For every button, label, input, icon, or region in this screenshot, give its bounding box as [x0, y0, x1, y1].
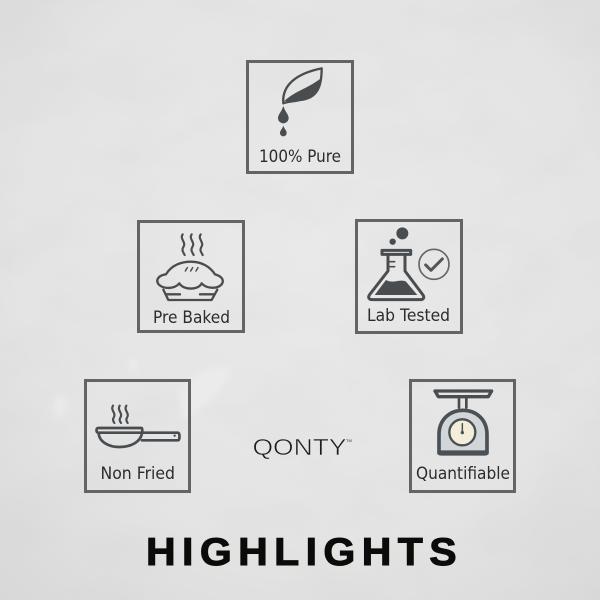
heading: HIGHLIGHTS: HIGHLIGHTS	[146, 531, 463, 574]
label: Non Fried: Non Fried	[100, 464, 175, 483]
label: 100% Pure: 100% Pure	[259, 147, 341, 166]
logo: QONTY: QONTY	[252, 434, 347, 460]
icon: check in circle	[419, 249, 449, 279]
label: Pre Baked: Pre Baked	[153, 308, 230, 327]
icon: pie with steam	[157, 234, 223, 300]
icon: leaf with drops	[278, 68, 322, 136]
label: Quantifiable: Quantifiable	[416, 464, 510, 483]
logo: QONTY: TM	[346, 438, 352, 443]
icon: frying pan with steam	[96, 406, 179, 447]
panel: Non Fried	[86, 380, 190, 492]
panel: Lab Tested	[356, 220, 462, 332]
icon: kitchen scale	[435, 391, 492, 456]
label: Lab Tested: Lab Tested	[367, 306, 450, 325]
icon: flask with bubbles	[369, 227, 424, 300]
panel: 100% Pure	[248, 62, 352, 172]
panel: Pre Baked	[138, 222, 244, 332]
heading: HIGHLIGHTS: HIGHLIGHTS	[146, 532, 463, 574]
panel: Quantifiable	[410, 380, 514, 492]
